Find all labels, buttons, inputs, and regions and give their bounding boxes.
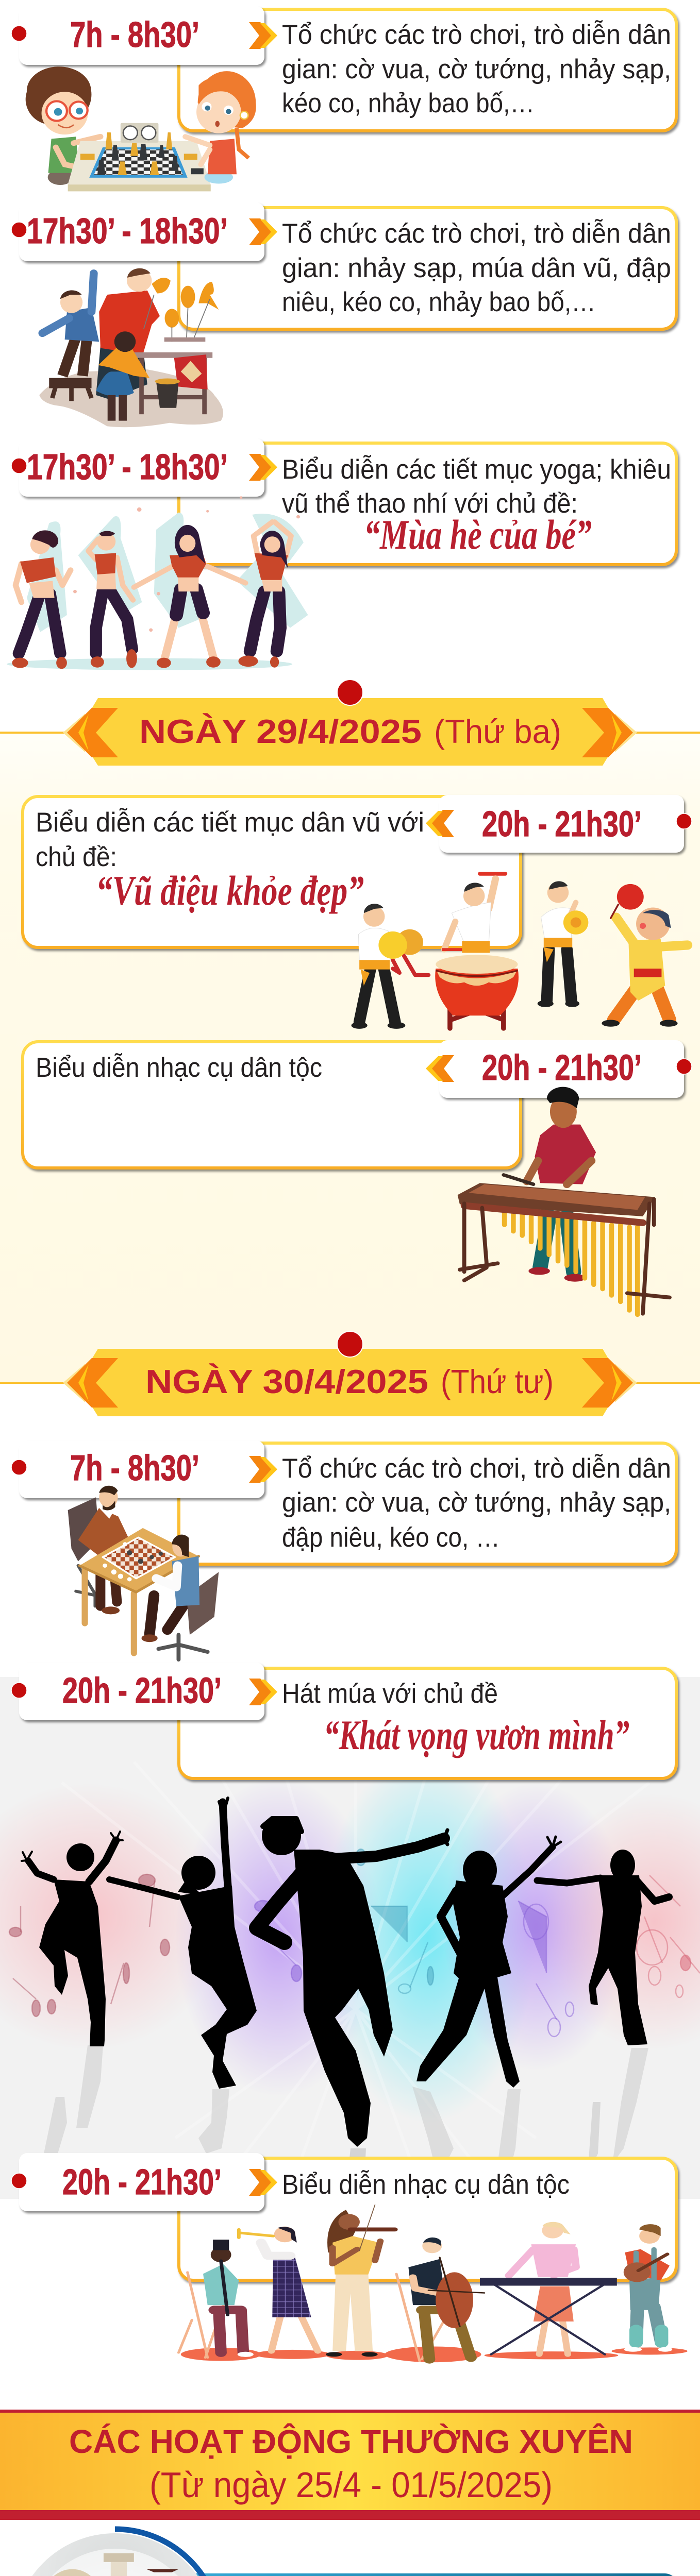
header: regular activities: [0, 2410, 700, 2520]
time tab 20h folk instruments: 20h - 21h30’: [482, 1047, 642, 1088]
card: yoga show: [179, 443, 676, 565]
dancer 3: [134, 525, 245, 660]
dancer silhouette 2: [109, 1798, 257, 2089]
card: games morning: [179, 9, 676, 131]
card: yoga show: Biểu diễn các tiết mục yoga; khiêu: [282, 454, 671, 485]
card: yoga show: vũ thể thao nhí với chủ đề:: [282, 488, 578, 519]
cello player: [396, 2238, 485, 2361]
day banner 30/4/2025: [0, 1331, 700, 1416]
card: games morning: Tổ chức các trò chơi, trò diễn dân: [282, 20, 671, 50]
background: grey dance section: [0, 1677, 700, 2199]
card: folk instruments: [23, 1042, 521, 1168]
floor reflections: [44, 2045, 648, 2199]
trumpet player: [239, 2227, 318, 2351]
time tab 20h folk instruments: [426, 1040, 692, 1098]
illustration: dancers: [7, 496, 308, 670]
banner shape: [77, 1349, 623, 1416]
card: folk dance: “Vũ điệu khỏe đẹp”: [96, 867, 364, 914]
banner text: NGÀY 29/4/2025: [139, 713, 422, 750]
banner shape: [77, 698, 623, 766]
card: folk instruments: Biểu diễn nhạc cụ dân tộc: [36, 1053, 322, 1083]
card: instruments 30/4: [179, 2158, 676, 2280]
card: games 30/4: [179, 1443, 676, 1564]
time tab 17h30: 17h30’ - 18h30’: [27, 211, 228, 251]
time tab 7h - 8h30: [11, 6, 277, 65]
ukulele player: [624, 2224, 672, 2352]
banner text: NGÀY 30/4/2025: [145, 1363, 428, 1400]
header date range: (Từ ngày 25/4 - 01/5/2025): [149, 2465, 553, 2505]
time tab 20h folk dance: 20h - 21h30’: [482, 804, 642, 844]
dancer silhouette 4: [416, 1837, 561, 2088]
illustration: folk musicians: [352, 874, 688, 1029]
time tab 20h instruments: [11, 2153, 277, 2211]
header title: CÁC HOẠT ĐỘNG THƯỜNG XUYÊN: [69, 2422, 633, 2460]
background: cream day section: [0, 733, 700, 1383]
card: games evening: [179, 208, 676, 329]
silhouette dancers: [22, 1798, 669, 2147]
clarinet player: [178, 2240, 254, 2358]
illustration: xylophone player: [458, 1087, 670, 1315]
dancer silhouette 1: [22, 1832, 123, 2046]
dancer 4: [250, 522, 291, 651]
card: games 30/4: Tổ chức các trò chơi, trò diễn dân: [282, 1453, 671, 1484]
cymbal player: [352, 904, 428, 1029]
drummer: [435, 874, 519, 1028]
card: folk dance: [23, 796, 521, 947]
timeline section 1: [7, 6, 676, 670]
time tab 20h instruments: 20h - 21h30’: [62, 2162, 222, 2202]
gong player: [538, 881, 588, 1007]
keyboard player: [480, 2222, 617, 2354]
illustration: toy figure maker and children: [39, 268, 223, 427]
time tab 17h30 yoga: 17h30’ - 18h30’: [27, 447, 228, 487]
violin player: [326, 2205, 395, 2357]
activity 1: exhibition: [13, 2529, 677, 2576]
time tab 17h30 yoga: [11, 438, 277, 497]
dancer silhouette 5: [537, 1850, 669, 2045]
time tab 20h folk dance: [426, 795, 692, 853]
time tab 7h - 8h30: 7h - 8h30’: [70, 14, 199, 55]
time tab 17h30: [11, 202, 277, 261]
dancer silhouette 3: [257, 1816, 447, 2147]
card: [119, 2575, 677, 2576]
card: singing dancing: Hát múa với chủ đề: [282, 1679, 498, 1709]
dancer 2: [88, 531, 133, 653]
card: games morning: gian: cờ vua, cờ tướng, nhảy sạp,: [282, 54, 671, 84]
banner dot: [337, 680, 363, 705]
time tab 20h singing: 20h - 21h30’: [62, 1670, 222, 1710]
time tab 7h 30/4: 7h - 8h30’: [70, 1448, 199, 1488]
timeline section 2: [23, 795, 692, 1315]
illustration: adults playing checkers: [68, 1486, 219, 1659]
card: singing dancing: [179, 1668, 676, 1778]
card: games evening: gian: nhảy sạp, múa dân vũ, đập: [282, 253, 671, 283]
time tab 7h 30/4: [11, 1440, 277, 1498]
card: folk dance: Biểu diễn các tiết mục dân vũ với: [36, 807, 424, 838]
card: games 30/4: đập niêu, kéo co, …: [282, 1522, 500, 1553]
time tab 20h singing: [11, 1663, 277, 1720]
circle frame: [13, 2529, 221, 2576]
timeline section 3: [11, 1440, 688, 2362]
music notes: [9, 1874, 170, 2016]
card: folk dance: chủ đề:: [36, 842, 117, 872]
dancer 1: [15, 530, 71, 653]
card: games 30/4: gian: cờ vua, cờ tướng, nhảy sạp,: [282, 1487, 671, 1518]
day banner 30/4/2025: (Thứ tư): [441, 1363, 554, 1400]
masked dancer with fan: [602, 884, 688, 1027]
illustration: youth band: [178, 2205, 688, 2362]
card: games morning: kéo co, nhảy bao bố,…: [282, 88, 535, 118]
card: yoga show: “Mùa hè của bé”: [364, 511, 592, 558]
day banner 29/4/2025: (Thứ ba): [434, 713, 561, 750]
illustration: children playing chess: [26, 66, 256, 191]
illustration: museum: [27, 2553, 201, 2576]
card: games evening: Tổ chức các trò chơi, trò diễn dân: [282, 218, 671, 249]
banner dot: [337, 1331, 363, 1357]
card: instruments 30/4: Biểu diễn nhạc cụ dân tộc: [282, 2170, 570, 2200]
card: games evening: niêu, kéo co, nhảy bao bố,…: [282, 287, 596, 317]
day banner 29/4/2025: [0, 680, 700, 766]
